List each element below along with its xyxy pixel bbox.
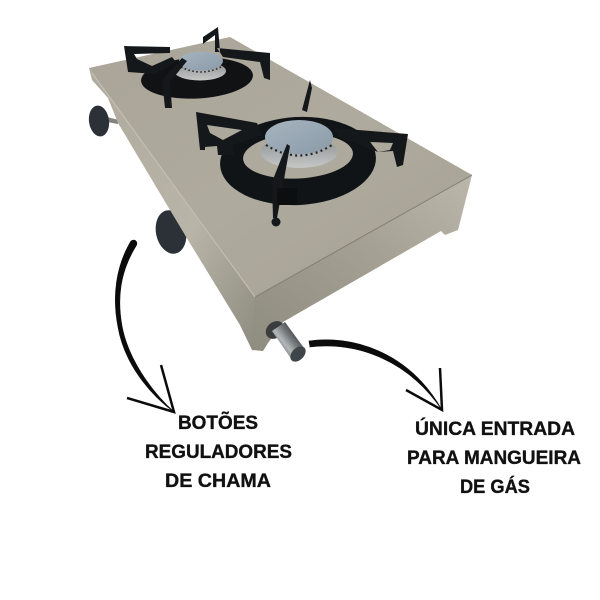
label: botões reguladores de chama: REGULADORES [145, 442, 292, 463]
rear flame control knob [87, 104, 119, 138]
front burner [196, 80, 408, 226]
label: botões reguladores de chama [145, 412, 292, 492]
label: única entrada para mangueira de gás [407, 418, 581, 498]
rear burner cap [174, 62, 226, 80]
label: botões reguladores de chama: DE CHAMA [165, 471, 271, 492]
front flame control knob [152, 207, 193, 257]
front burner grate [196, 80, 408, 218]
rear burner ring [140, 55, 254, 101]
arrow: to flame control knobs [115, 240, 174, 412]
front burner ring [218, 113, 378, 209]
label: única entrada para mangueira de gás: ÚNICA ENTRADA [415, 418, 575, 440]
left side panel [89, 68, 255, 350]
label: botões reguladores de chama: BOTÕES [178, 412, 258, 434]
front burner cap [260, 136, 338, 168]
top surface [89, 37, 472, 297]
rear burner [124, 27, 270, 108]
front panel [252, 175, 472, 351]
rear burner grate [124, 27, 270, 108]
arrow: to gas inlet [309, 340, 442, 410]
label: única entrada para mangueira de gás: DE GÁS [460, 476, 530, 498]
label: única entrada para mangueira de gás: PARA MANGUEIRA [407, 448, 581, 469]
stove body [89, 37, 472, 351]
gas inlet pipe [262, 317, 309, 365]
front burner opening [242, 131, 354, 181]
